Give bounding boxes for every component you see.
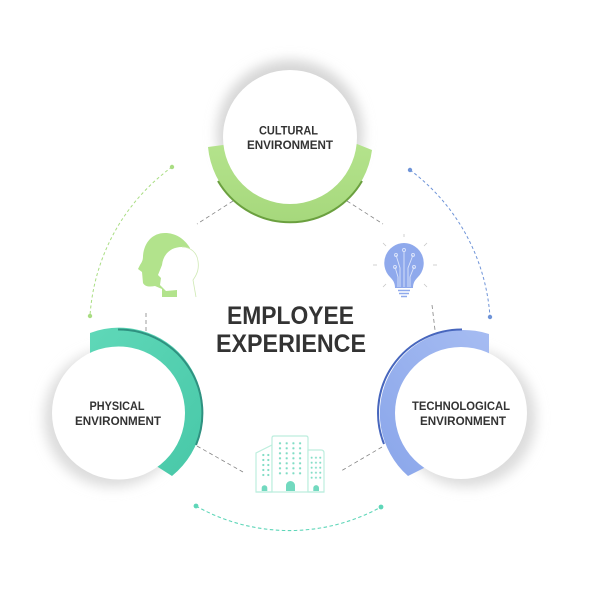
panel: technological environment [378,329,536,487]
circle: cultural white [223,70,357,204]
title: employee experience: EXPERIENCE [216,330,366,358]
label: cultural environment: ENVIRONMENT [247,140,333,152]
panel: physical environment [44,328,203,487]
label: cultural environment [247,126,333,152]
arrow: green dotted arc [88,165,174,318]
label: cultural environment: CULTURAL [259,126,318,138]
panel: cultural environment [208,60,372,222]
ring: technological blue [380,330,489,476]
label: technological environment [412,401,510,428]
ring: cultural green [208,144,372,222]
ring edge: physical dark [118,329,202,445]
label: physical environment [75,401,161,428]
arrow: blue dotted arc [408,168,492,319]
icon: office buildings [256,436,324,492]
title: employee experience: EMPLOYEE [227,302,354,330]
circle shadow: cultural [217,60,363,206]
ring: physical teal [90,328,203,476]
title: employee experience [216,302,366,358]
circle shadow: physical [44,349,182,487]
label: physical environment: ENVIRONMENT [75,416,161,428]
ring edge: cultural dark [218,181,362,222]
label: physical environment: PHYSICAL [90,401,144,413]
connector: dashed grey lines [146,201,435,472]
circle: technological white [395,347,527,479]
label: technological environment: TECHNOLOGICAL [412,401,510,413]
icon: light bulb [373,234,437,296]
circle shadow: technological [398,349,536,487]
label: technological environment: ENVIRONMENT [420,416,506,428]
arrow: teal dotted arc [194,504,383,531]
icon: heads [138,233,198,297]
ring edge: technological dark [378,329,462,444]
circle: physical white [52,346,185,480]
